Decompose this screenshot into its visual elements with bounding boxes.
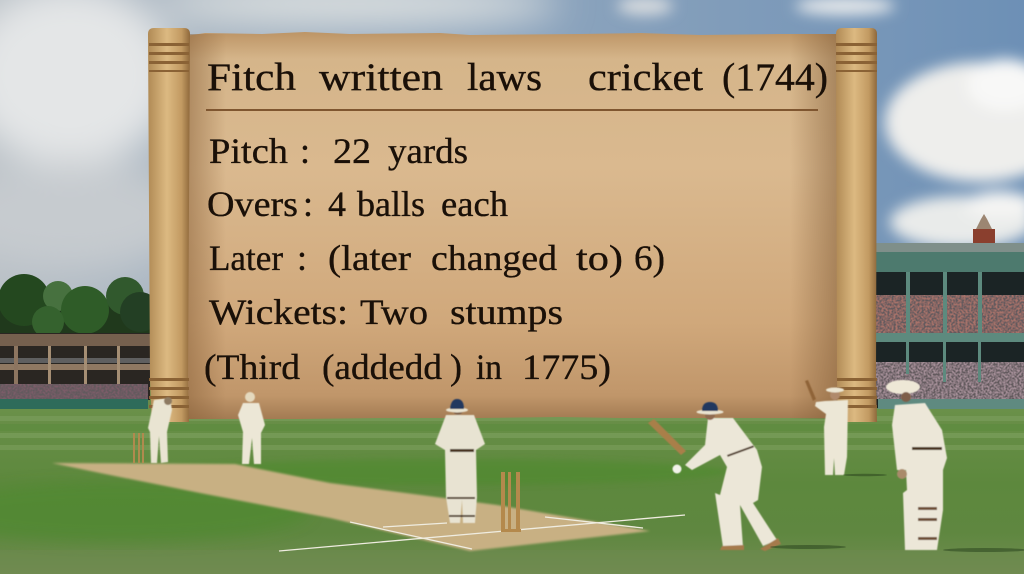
scroll parchment panel [186, 32, 838, 419]
player: batsman with bat and ball [648, 402, 781, 551]
line: third stump: (Third [204, 347, 300, 387]
line: third stump [204, 347, 611, 387]
line: overs: balls [357, 184, 425, 224]
scroll roller: right [836, 28, 877, 422]
line: overs: Overs [207, 184, 298, 224]
background: left pavilion [0, 333, 150, 410]
line: wickets [209, 292, 563, 332]
scroll title: written [319, 56, 443, 99]
crease lines [279, 515, 685, 551]
pitch: sandy strip with crease lines [52, 463, 685, 551]
scroll title: laws [467, 56, 542, 99]
line: overs: : [303, 184, 313, 224]
scroll roller: left [148, 28, 190, 422]
line: third stump: in [476, 347, 502, 387]
background: right grandstand [875, 214, 1024, 409]
line: overs: each [441, 184, 508, 224]
player: bowler far left [148, 397, 172, 463]
player shadows [770, 474, 1024, 552]
line: pitch length: yards [388, 131, 468, 171]
line: later change: : [297, 238, 307, 278]
player: central figure [435, 399, 485, 523]
scroll title: (1744) [722, 56, 828, 99]
line: pitch length: 22 [333, 131, 371, 171]
line: wickets: Two [360, 292, 428, 332]
cricket field: striped grass [0, 409, 1024, 574]
player: fielder [238, 392, 265, 464]
line: third stump: ) [450, 347, 462, 387]
title divider rule [206, 109, 818, 111]
line: later change: changed [431, 238, 557, 278]
line: later change: to) [576, 238, 623, 278]
line: wickets: stumps [450, 292, 563, 332]
line: later change [209, 238, 665, 278]
scroll title [207, 56, 828, 99]
line: pitch length [209, 131, 468, 171]
stumps: near wicket [501, 472, 521, 532]
line: later change: (later [328, 238, 411, 278]
line: pitch length: : [300, 131, 310, 171]
scroll title: cricket [588, 56, 703, 99]
player: near fielder in white hat [886, 380, 947, 550]
background: cloudy sky [0, 0, 1024, 300]
line: later change: Later [209, 238, 283, 278]
scroll title: Fitch [207, 56, 296, 99]
background: trees on the left [0, 274, 160, 338]
line: wickets: Wickets: [209, 292, 348, 332]
line: pitch length: Pitch [209, 131, 288, 171]
line: third stump: 1775) [522, 347, 611, 387]
line: overs: 4 [328, 184, 346, 224]
line: overs [207, 184, 508, 224]
stumps: far wicket [133, 433, 144, 463]
line: third stump: (addedd [322, 347, 442, 387]
player: umpire at right with bat raised [805, 380, 848, 475]
line: later change: 6) [634, 238, 665, 278]
